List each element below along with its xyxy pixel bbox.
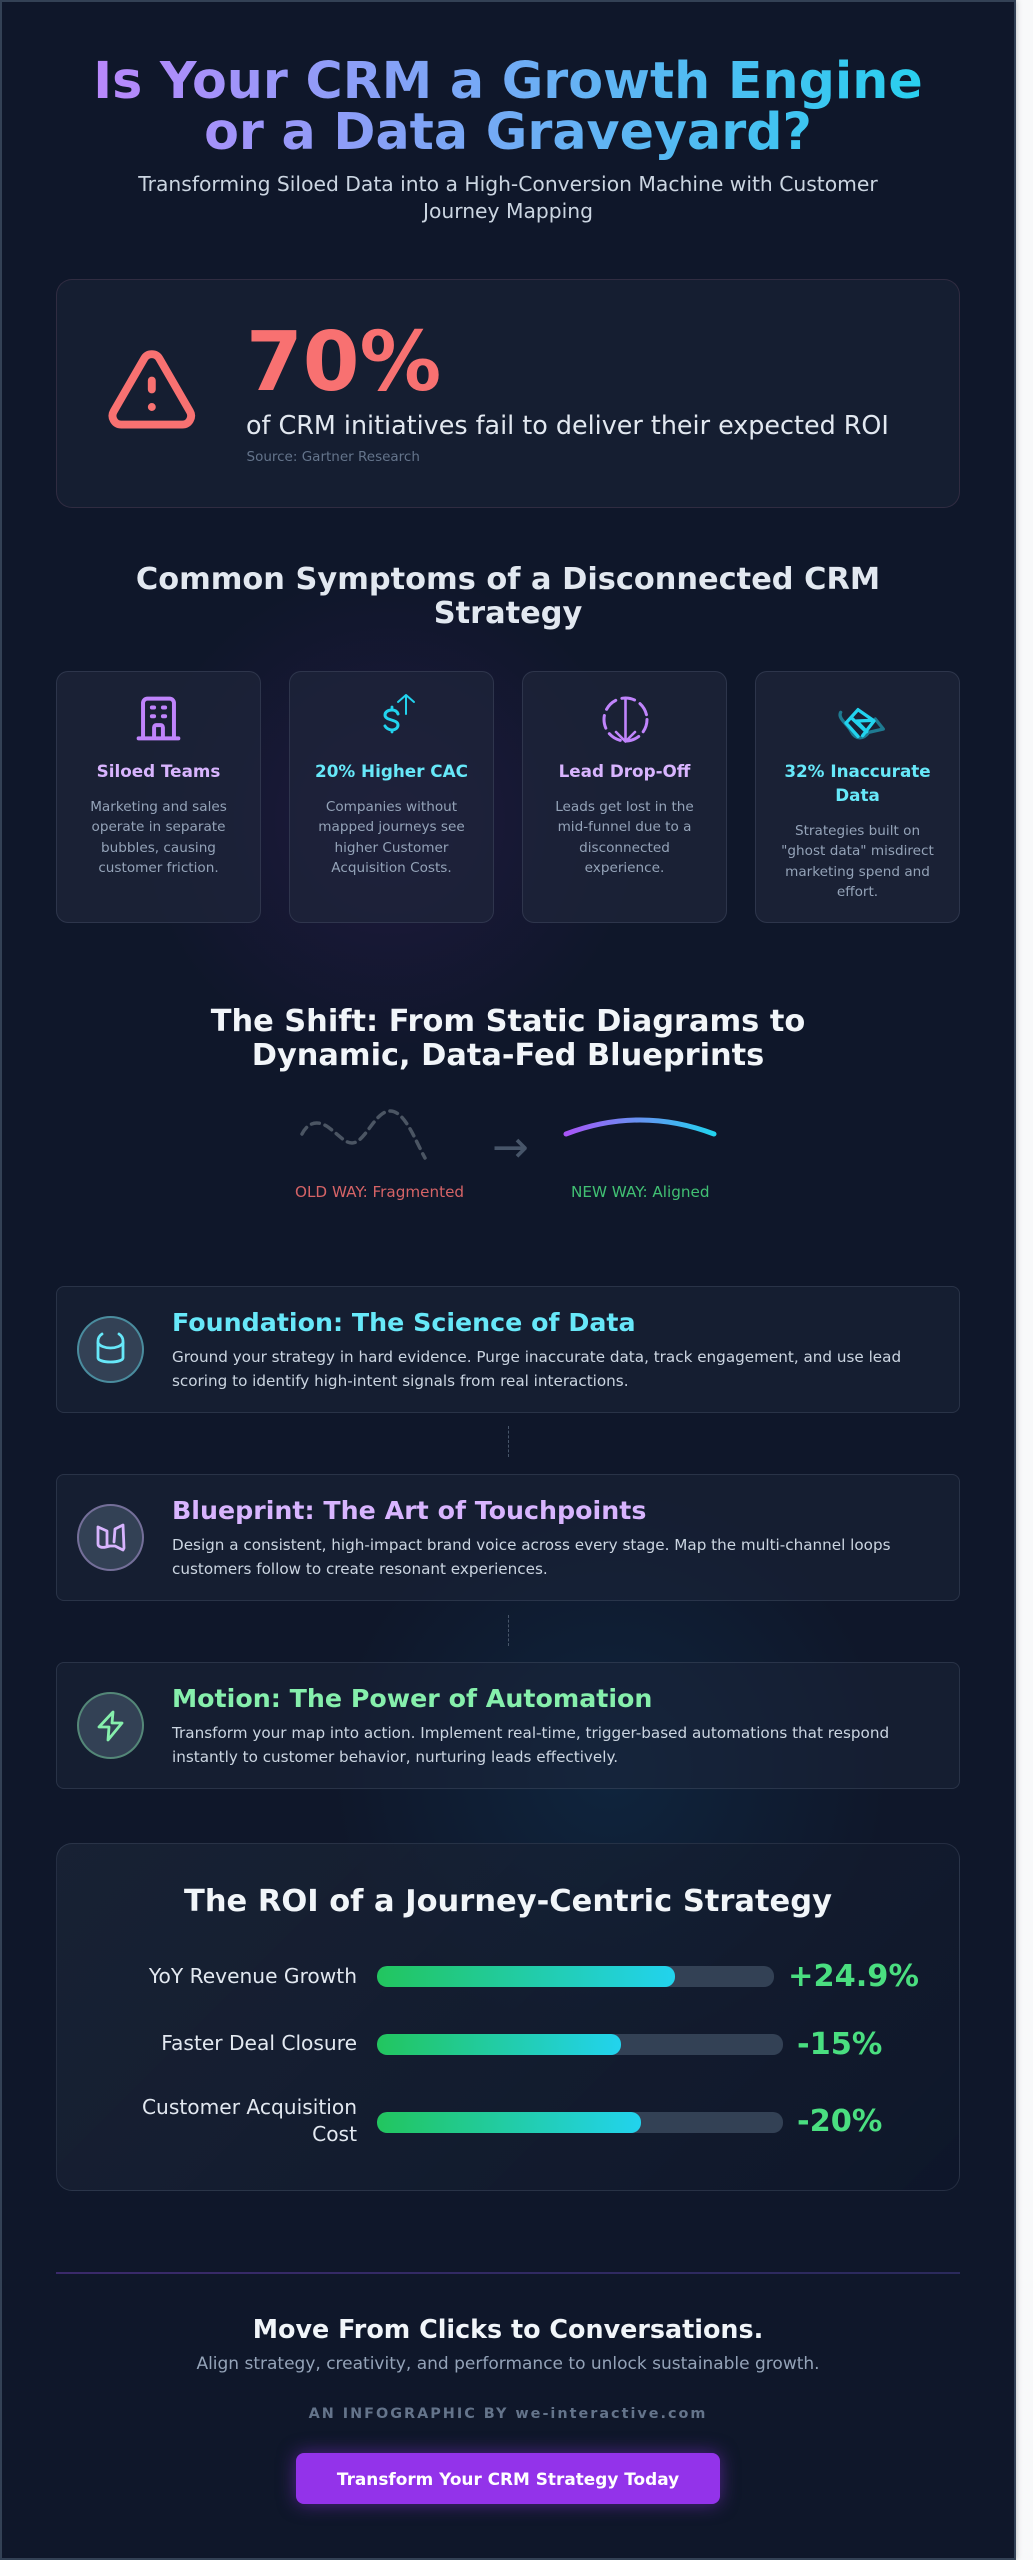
step text [172,1724,889,1766]
card text: effort. [837,884,878,900]
card text: Acquisition Costs. [331,860,452,876]
card text [90,799,227,876]
card: lead drop-off [522,671,727,923]
label: YoY Revenue Growth [149,1964,357,1988]
step text: scoring to identify high-intent signals from real interactions. [172,1372,629,1390]
panel: 70% statistic [56,279,960,508]
call to action button [296,2453,720,2504]
source: Source: Gartner Research [246,449,420,465]
step title: Foundation: The Science of Data [172,1308,636,1337]
card text: "ghost data" misdirect [781,843,934,859]
card text: customer friction. [98,860,219,876]
card: higher CAC [289,671,494,923]
card: inaccurate data [755,671,960,923]
step title: Motion: The Power of Automation [172,1684,652,1713]
label: Cost [312,2122,357,2146]
card title: 20% Higher CAC [315,761,468,781]
icon: warning triangle [108,350,196,428]
row: revenue growth [148,1959,919,1994]
card text: disconnected [579,840,670,856]
step text: Transform your map into action. Implement real-time, trigger-based automations that respond [172,1724,889,1742]
subtitle: Transforming Siloed Data into a High-Conversion Machine with Customer [138,172,878,196]
step text [172,1536,891,1578]
heading: the shift: The Shift: From Static Diagrams to [211,1004,805,1039]
ROI title: The ROI of a Journey-Centric Strategy [184,1884,832,1919]
row: deal closure [161,2027,882,2062]
blue glow [320,1480,900,2060]
label [142,2095,357,2146]
card text [555,799,694,876]
card text: Marketing and sales [90,799,227,815]
card title: Lead Drop-Off [559,761,690,781]
card text: operate in separate [92,819,225,835]
card text: Strategies built on [795,823,920,839]
step text [172,1348,901,1390]
row: acquisition cost [142,2095,882,2146]
connector [508,1426,509,1457]
heading: symptoms: Common Symptoms of a Disconnected CRM [136,562,880,596]
value: -20% [797,2104,882,2139]
icon: broken data [838,708,885,740]
step text: Design a consistent, high-impact brand voice across every stage. Map the multi-channel loops [172,1536,891,1554]
step title: Blueprint: The Art of Touchpoints [172,1496,646,1525]
card title [784,761,931,805]
bar [377,2112,783,2133]
attribution: AN INFOGRAPHIC BY we-interactive.com [309,2406,707,2422]
card text: experience. [585,860,664,876]
new way label: NEW WAY: Aligned [571,1183,709,1201]
new way curve [564,1118,716,1136]
card text [781,823,934,900]
card text: higher Customer [335,840,448,856]
card text: bubbles, causing [101,840,216,856]
card text: mapped journeys see [318,819,465,835]
connector [508,1615,509,1646]
call to action button: Transform Your CRM Strategy Today [337,2469,679,2489]
heading: symptoms [136,562,880,630]
label: Faster Deal Closure [161,2031,357,2055]
step: foundation [56,1286,960,1413]
card text: Leads get lost in the [555,799,694,815]
icon: open book [77,1504,144,1571]
purple glow [130,560,650,1080]
closing text: Align strategy, creativity, and performance to unlock sustainable growth. [196,2354,820,2374]
icon: lightning bolt [77,1692,144,1759]
step text: instantly to customer behavior, nurturing leads effectively. [172,1748,618,1766]
value: -15% [797,2027,882,2062]
card text [318,799,465,876]
heading: symptoms: Strategy [434,596,582,630]
step: blueprint [56,1474,960,1601]
old way label: OLD WAY: Fragmented [295,1183,464,1201]
icon: building [136,696,180,740]
diagram: old way to new way [295,1109,716,1201]
card text: mid-funnel due to a [558,819,691,835]
panel: ROI [56,1843,960,2191]
big number: 70% [246,315,441,410]
icon: dashed circle with down arrow [602,696,648,743]
subtitle [138,172,878,223]
card title: 32% Inaccurate [784,761,931,781]
subtitle: Journey Mapping [423,199,593,223]
card title: Data [835,785,880,805]
heading: the shift [210,1004,805,1073]
card: siloed teams [56,671,261,923]
statistic caption: of CRM initiatives fail to deliver their expected ROI [246,410,889,440]
card title: Siloed Teams [97,761,220,781]
icon: data cylinder [77,1316,144,1383]
closing heading: Move From Clicks to Conversations. [253,2314,763,2344]
panel: symptoms [56,671,960,923]
title [56,56,960,171]
title: Is Your CRM a Growth Engine [93,51,923,110]
step: motion [56,1662,960,1789]
value: +24.9% [788,1959,919,1994]
step text: customers follow to create resonant experiences. [172,1560,548,1578]
arrow: → [492,1122,529,1173]
card text: marketing spend and [785,864,930,880]
label: Customer Acquisition [142,2095,357,2119]
icon: dollar with arrow [383,694,415,734]
heading: the shift: Dynamic, Data-Fed Blueprints [252,1038,764,1073]
card text: Companies without [326,799,457,815]
old way curve [300,1109,427,1160]
divider [56,2272,960,2274]
bar [377,1966,774,1987]
title: or a Data Graveyard? [204,102,812,160]
step text: Ground your strategy in hard evidence. Purge inaccurate data, track engagement, and use lead [172,1348,901,1366]
bar [377,2034,783,2055]
